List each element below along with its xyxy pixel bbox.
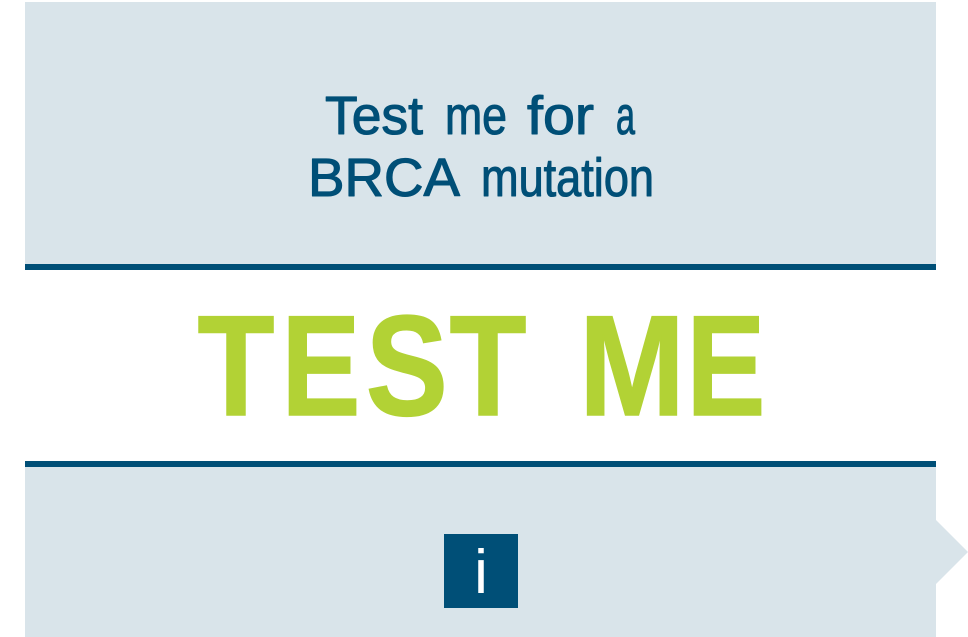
- heading: Test me for a BRCA mutation: for: [527, 86, 594, 146]
- heading: Test me for a BRCA mutation: a: [616, 86, 636, 146]
- title: TEST ME: E: [686, 287, 765, 446]
- panel: bottom bar with right arrow: [25, 467, 968, 637]
- title: TEST ME: T: [198, 287, 274, 446]
- title: TEST ME: S: [366, 287, 448, 446]
- heading: Test me for a BRCA mutation: Test: [325, 86, 423, 146]
- panel: top message background: [25, 2, 936, 264]
- heading: Test me for a BRCA mutation: me: [445, 86, 507, 146]
- title: TEST ME: M: [579, 287, 685, 446]
- title: TEST ME: [198, 287, 765, 446]
- heading: Test me for a BRCA mutation: [308, 86, 654, 208]
- title: TEST ME: T: [450, 287, 526, 446]
- icon: information button: i: [474, 538, 488, 607]
- bottom rule: [25, 461, 936, 467]
- title: TEST ME: E: [281, 287, 360, 446]
- top rule: [25, 264, 936, 270]
- heading: Test me for a BRCA mutation: BRCA: [308, 148, 460, 208]
- icon: information button: [444, 534, 518, 608]
- heading: Test me for a BRCA mutation: mutation: [481, 148, 654, 208]
